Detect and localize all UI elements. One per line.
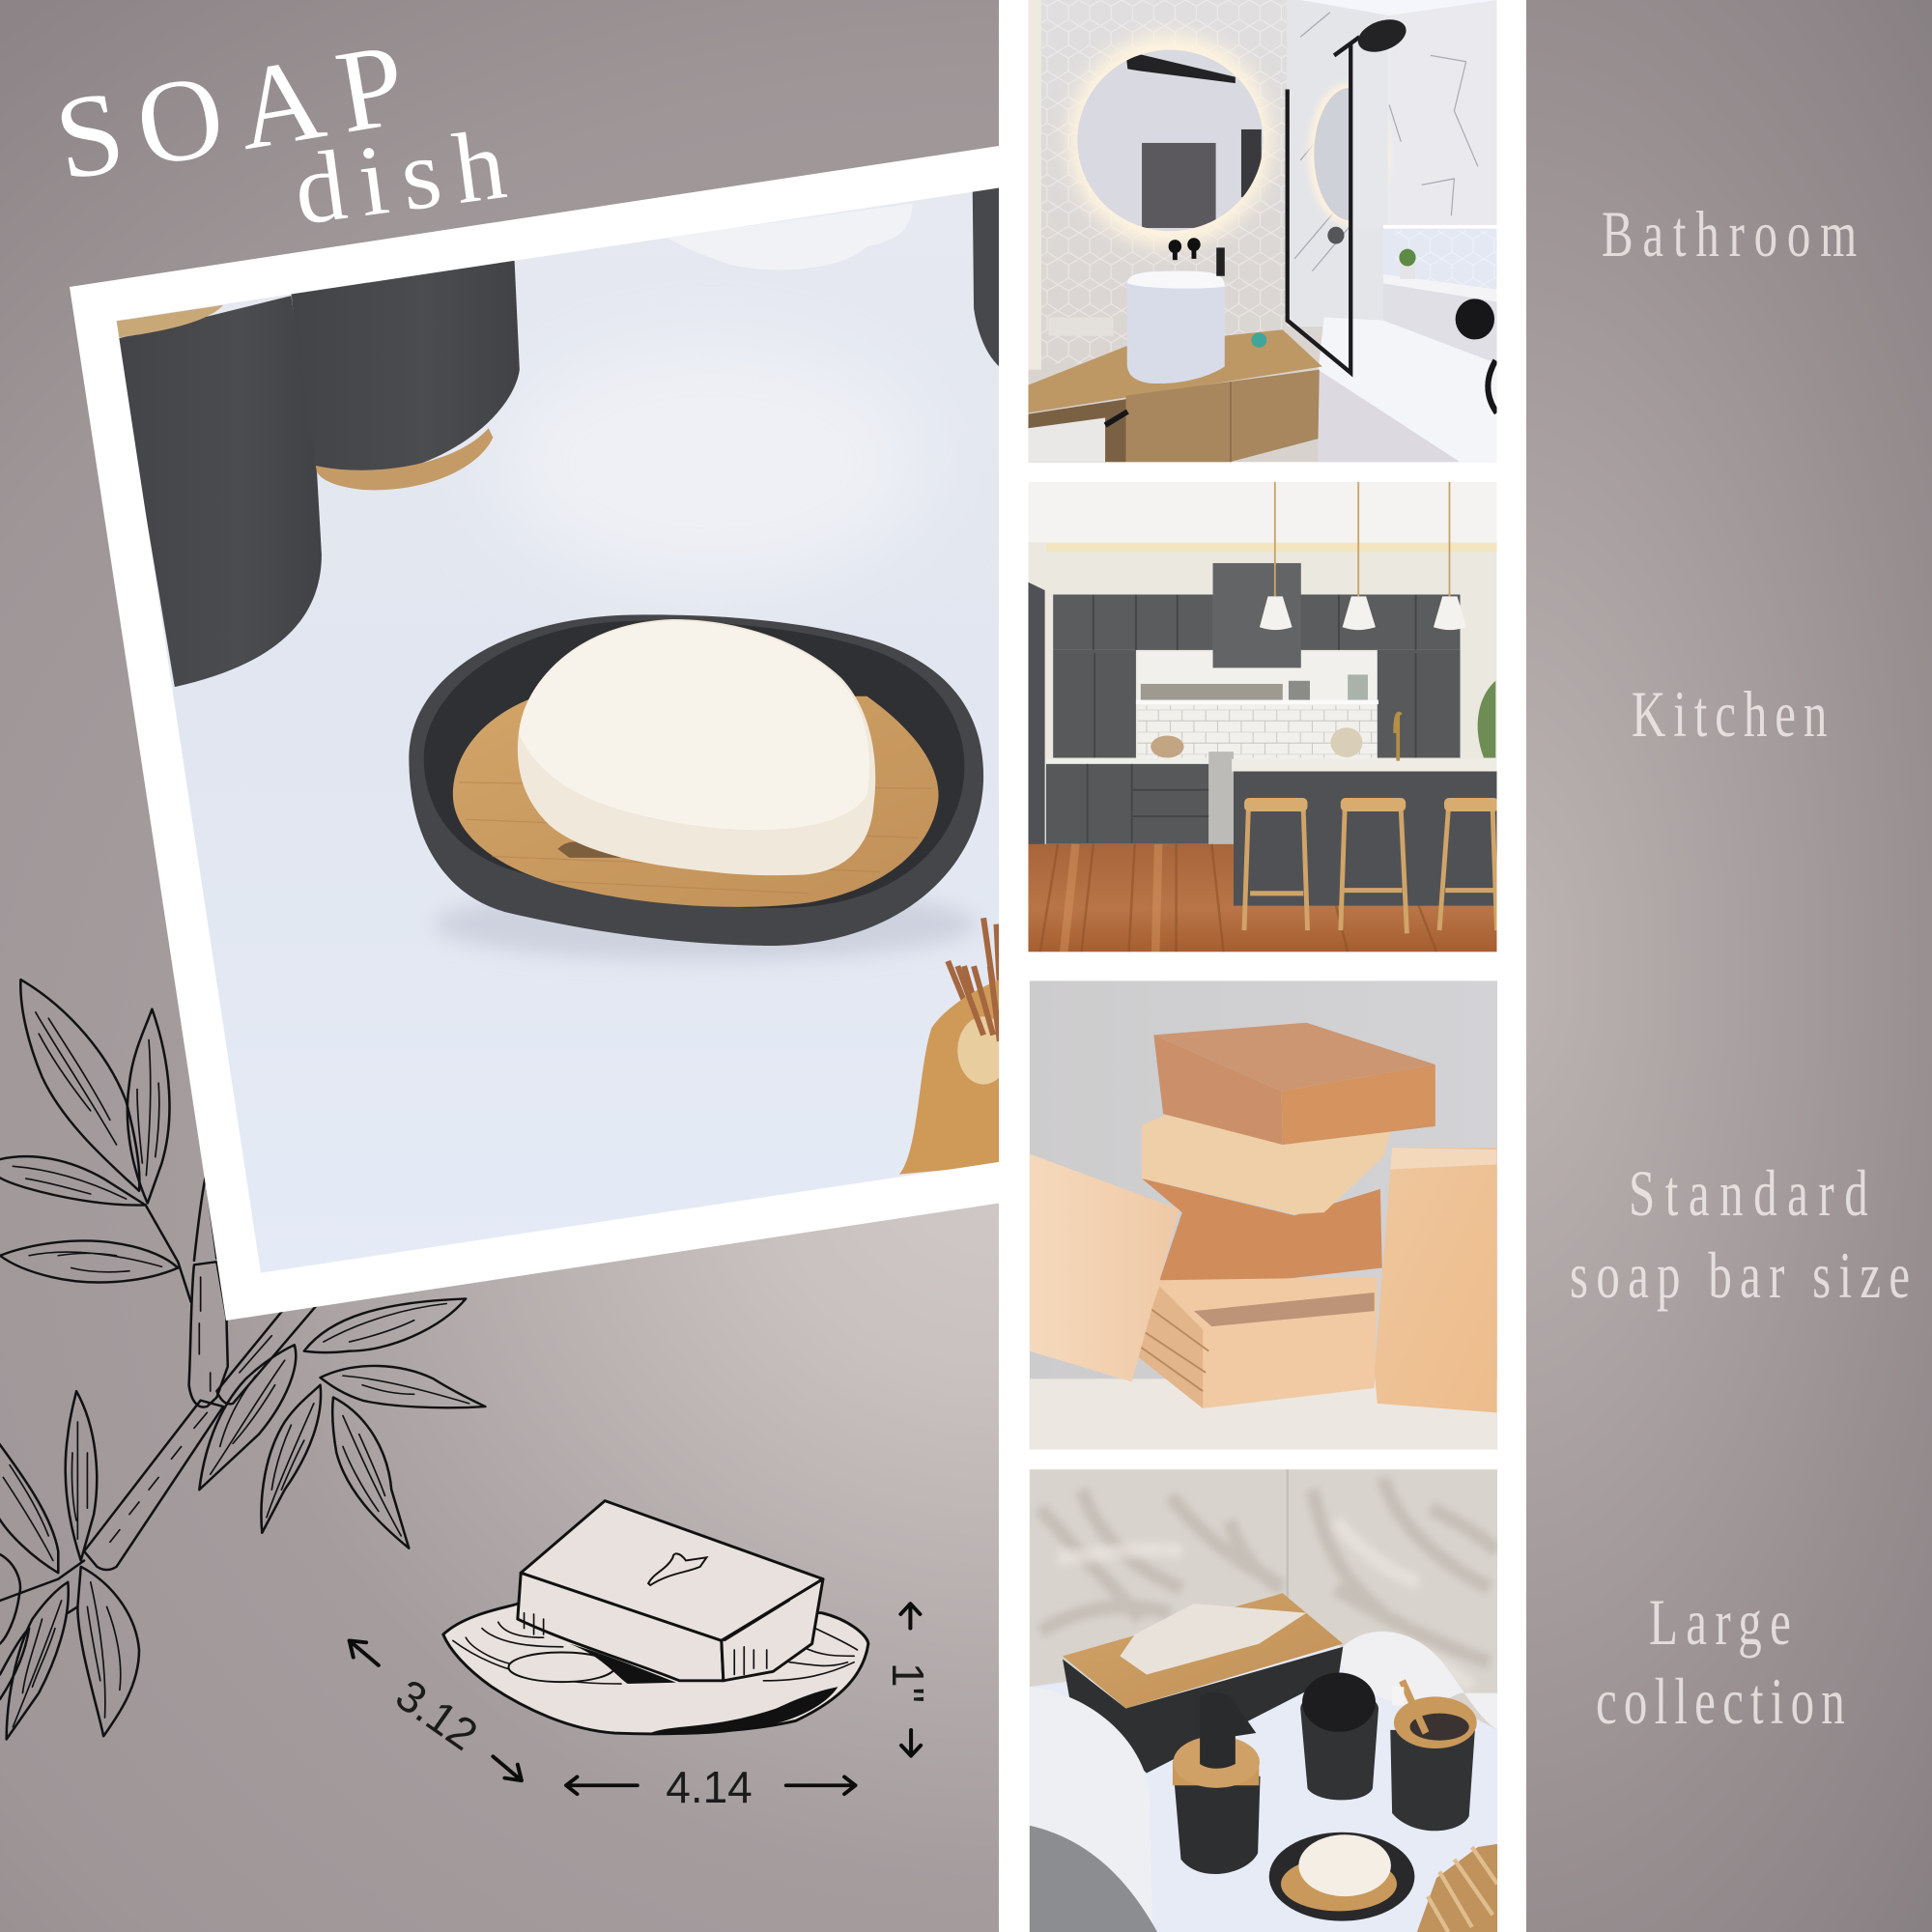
photo: bathroom — [1028, 0, 1496, 462]
title word: SOAP: SOAP — [46, 16, 430, 206]
label: Standard soap bar size — [1570, 1156, 1910, 1312]
label line: soap bar size: soap bar size — [1570, 1238, 1910, 1312]
label: Bathroom: Bathroom — [1602, 197, 1857, 270]
main photo — [65, 173, 1009, 1282]
label line: collection: collection — [1596, 1664, 1845, 1738]
photo: soap bars — [1030, 980, 1497, 1450]
icon: bird emblem on soap — [648, 1553, 706, 1585]
label: Large collection — [1596, 1585, 1845, 1738]
panel: left grey background — [0, 0, 999, 1932]
dimension value 3.12: 3.12 — [387, 1669, 487, 1760]
dimension: 3.12 arrow group — [350, 1640, 522, 1780]
dimension value 4.14: 4.14 — [666, 1762, 753, 1812]
illustration: soap bar on dish — [443, 1501, 868, 1735]
dimension: 1 inch arrow group — [883, 1604, 933, 1756]
title: SOAP dish — [46, 16, 526, 246]
label: Kitchen: Kitchen — [1632, 677, 1827, 751]
white frame — [70, 146, 999, 1321]
arrows for 3.12 — [350, 1640, 522, 1780]
arrows for 1 inch — [900, 1604, 921, 1756]
label line: Large: Large — [1649, 1585, 1791, 1659]
photo frame: main soap dish — [65, 146, 1009, 1321]
dimension: 4.14 arrow group — [566, 1762, 855, 1812]
dimension value 1 inch: 1" — [883, 1662, 933, 1703]
illustration: bamboo branch — [0, 980, 485, 1739]
label line: Standard: Standard — [1629, 1156, 1868, 1230]
photo: kitchen — [1028, 482, 1498, 952]
arrows for 4.14 — [566, 1776, 855, 1794]
photo: bathroom collection — [1030, 1469, 1497, 1932]
title word: dish: dish — [288, 106, 526, 246]
panel: right grey background — [1526, 0, 1932, 1932]
panel: white centre strip — [999, 0, 1526, 1932]
